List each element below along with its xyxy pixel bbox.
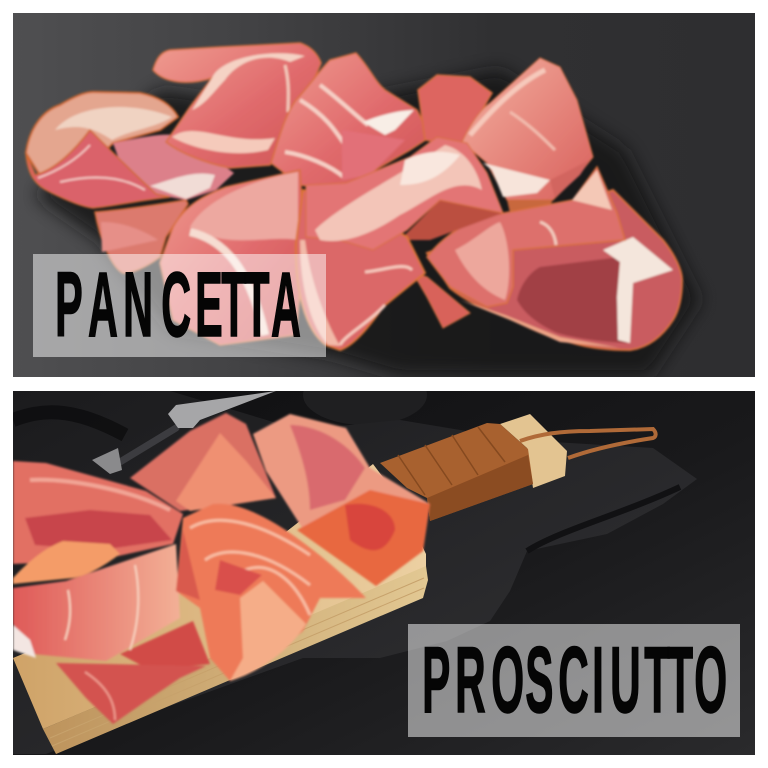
slice: left centre [160,170,304,345]
slice: dark fold [400,200,503,240]
icon: fork [92,391,276,474]
slice: right top small [418,75,492,145]
slice: large left [13,544,180,661]
slice: pink back [113,135,234,200]
prosciutto slices [13,413,430,724]
label: pancetta: PANCETTA [55,253,301,357]
slice: bottom [56,663,206,724]
wooden board [13,414,567,754]
slice: centre fold [306,137,503,250]
dark slate background [13,13,755,377]
slice: centre down [296,190,425,350]
slice: right large [427,190,682,350]
slice: top left [13,461,183,564]
shadow under meat [35,70,700,376]
slice: right fold [427,167,625,307]
panel: prosciutto [13,365,755,755]
slice: centre top [271,53,430,190]
dark bowl [303,391,427,424]
slice: back right [252,412,430,528]
slice: right top [462,58,593,200]
slice: small lower fold [95,200,188,273]
panel: pancetta [13,13,755,377]
slice: back left [130,413,276,511]
slice: main front [176,504,366,681]
slice: top [153,43,321,168]
slice: pale back flap [26,92,178,185]
slice: peach fold [13,541,120,584]
label: prosciutto: PROSCIUTTO [422,628,727,733]
slice: lower red [120,621,210,670]
pancetta slices [26,43,682,350]
leather handle wrap [380,423,656,521]
slice: small orange fold [507,200,553,213]
slice: left triangle [26,130,170,208]
dark background [13,391,755,755]
slice: lower right tail [413,273,470,328]
black cloth [13,391,697,754]
